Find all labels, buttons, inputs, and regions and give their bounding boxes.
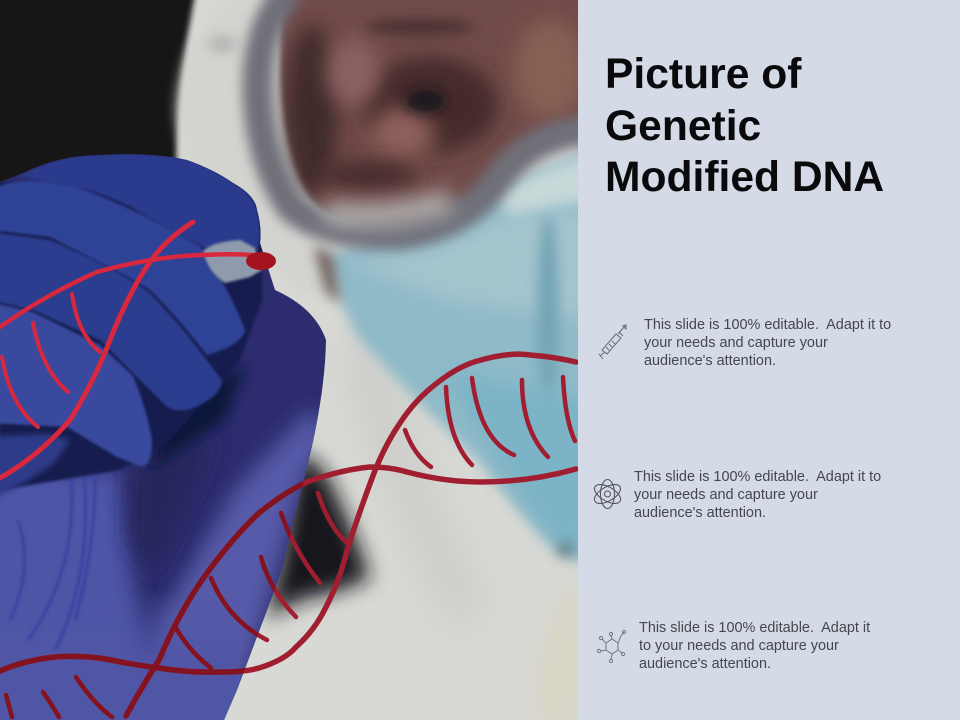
finger: top [20,154,260,250]
helix: upper red strand [0,222,262,478]
finger: fifth [0,434,70,500]
dark background top left [0,0,205,200]
helix shading over the glove [0,480,304,720]
finger: third [0,232,222,410]
pen [203,240,262,283]
pen tip [246,252,276,270]
goggles frame [258,0,590,234]
text block: syringe: This slide is 100% editable. Adapt it to your needs and capture your audience's attention. [644,317,891,369]
dark collar shadow [266,452,370,618]
glove folds [9,476,97,650]
icon: molecule [596,630,626,664]
icon: atom [594,479,622,509]
finger: fourth [0,302,152,466]
glove forearm base [0,590,240,720]
blue glove [0,150,340,720]
helix: lower strands and rungs [0,354,576,717]
background: protective suit [0,0,578,720]
mask [330,150,590,565]
finger: second [0,181,245,355]
icon: syringe [598,324,626,360]
title: Picture of Genetic Modified DNA [605,50,884,201]
hood [177,0,335,300]
text block: atom: This slide is 100% editable. Adapt it to your needs and capture your audience's attention. [634,469,881,521]
face behind goggles [280,0,620,230]
photo: gloved hand drawing a DNA helix in front of a scientist [0,0,578,720]
text block: molecule: This slide is 100% editable. Adapt it to your needs and capture your audience's attention. [639,620,870,672]
finger gaps [0,182,262,490]
